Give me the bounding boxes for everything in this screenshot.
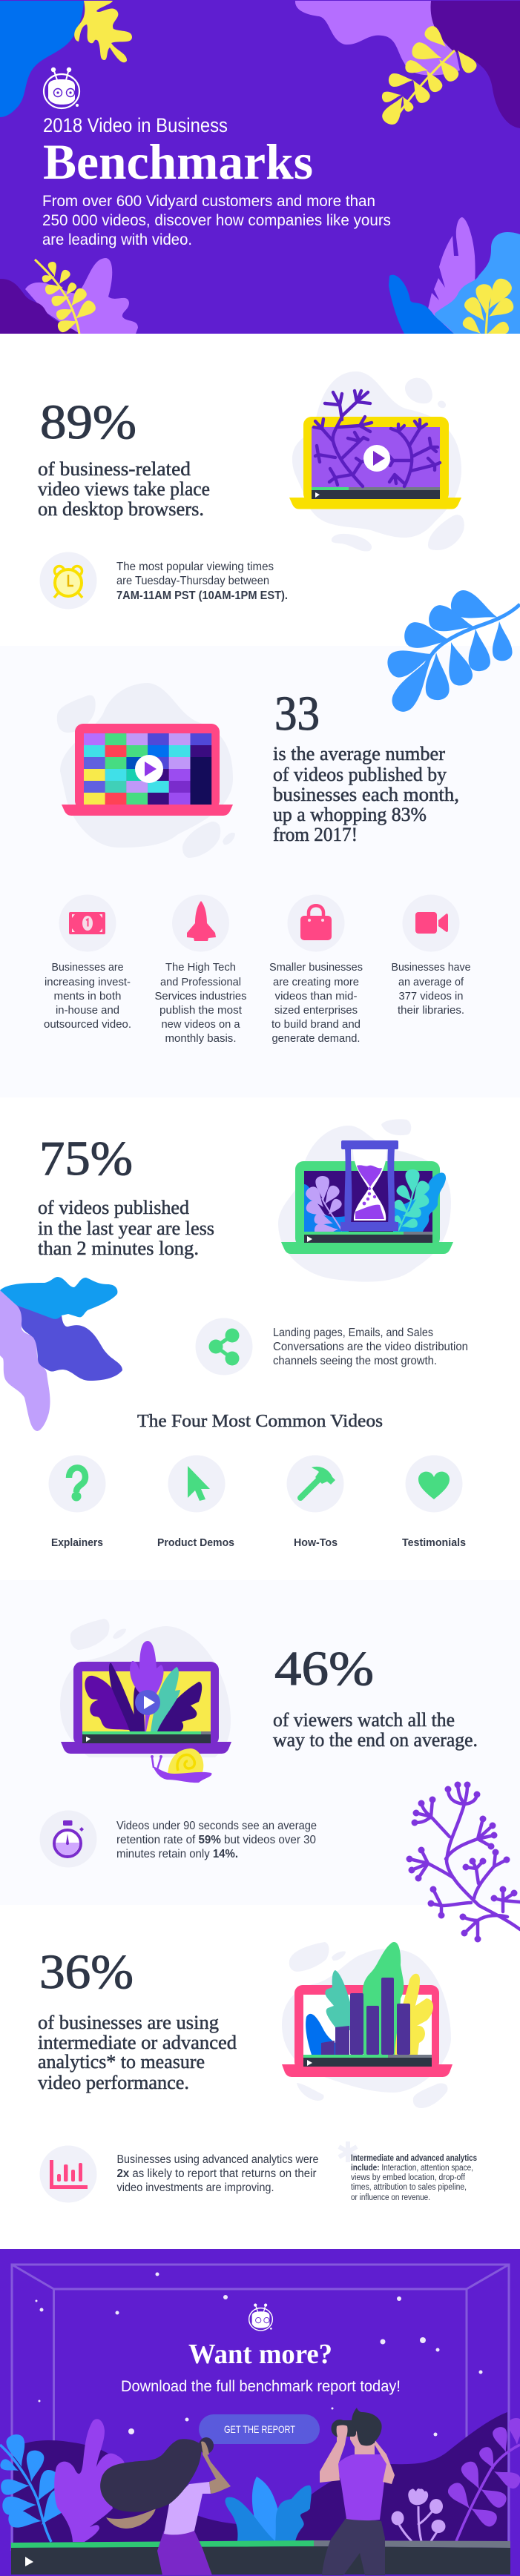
decoration: purple plant <box>54 2419 125 2542</box>
text block: investments: increasing invest- <box>45 977 131 988</box>
decoration: faint asterisk <box>339 2141 357 2162</box>
text block: advanced analytics: video investments are improving. <box>117 2182 274 2194</box>
text block: stat description <box>273 1709 478 1751</box>
text block: retention: retention rate of 59% but videos over 30 <box>116 1834 316 1846</box>
text block: stat description <box>38 2012 237 2093</box>
text block: investments: ments in both <box>53 991 122 1003</box>
text block: stat description: of businesses are using <box>38 2012 219 2033</box>
text block: advanced analytics: 2x as likely to report that returns on their <box>117 2167 316 2180</box>
panel: hero header <box>0 0 520 340</box>
icon: alarm clock <box>40 552 96 610</box>
button: get the report <box>199 2414 320 2444</box>
icon: snail <box>151 1748 211 1783</box>
label: product demos: Product Demos <box>157 1537 234 1549</box>
text block: industries: monthly basis. <box>165 1033 236 1045</box>
text block: stat description: up a whopping 83% <box>273 804 427 825</box>
item: how-tos <box>286 1455 344 1549</box>
text block: intro paragraph: are leading with video. <box>42 231 192 248</box>
stat: 75%: 75% <box>39 1132 133 1186</box>
text block: advanced analytics <box>117 2153 319 2194</box>
heading: four most common videos: The Four Most Common Videos <box>137 1412 383 1431</box>
text block: distribution channels: Landing pages, Emails, and Sales <box>273 1327 433 1339</box>
text block: stat description: video performance. <box>38 2072 189 2093</box>
decoration: teal branch on screen <box>392 1169 432 1231</box>
text block: smaller businesses: sized enterprises <box>274 1005 358 1017</box>
label: testimonials: Testimonials <box>402 1537 466 1549</box>
text block: stat description <box>38 458 210 520</box>
text block: stat description: on desktop browsers. <box>38 498 204 520</box>
text block: stat description: video views take place <box>38 478 210 500</box>
chart: video thumbnail grid <box>84 733 211 805</box>
icon: hammer <box>300 1467 335 1498</box>
stat: 36%: 36% <box>39 1945 134 1999</box>
video player bar <box>11 2540 510 2575</box>
text block: analytics footnote: views by embed location, drop-off <box>351 2173 466 2182</box>
decoration: bottom-right lilac fern <box>427 217 475 334</box>
decoration: right purple branch <box>445 2418 520 2541</box>
illustration: woman with binoculars <box>100 2437 231 2575</box>
text block: video libraries: 377 videos in <box>399 991 463 1003</box>
text block: smaller businesses: videos than mid- <box>274 991 358 1003</box>
illustration: pink laptop with video grid <box>57 683 235 858</box>
icon: video camera <box>415 912 448 934</box>
text block: industries <box>154 962 246 1045</box>
item: video libraries <box>392 894 470 1017</box>
text block: investments: Businesses are <box>52 962 123 974</box>
decoration: dark hills <box>13 2412 507 2551</box>
label: how-tos: How-Tos <box>294 1537 338 1549</box>
text block: distribution channels <box>273 1327 468 1367</box>
text block: intro paragraph: 250 000 videos, discover how companies like yours <box>42 212 391 229</box>
text block: analytics footnote: or influence on revenue. <box>351 2193 430 2202</box>
decoration: purple coral <box>409 1785 520 1939</box>
decoration: bottom-left yellow branch <box>35 260 98 334</box>
text block: retention: Videos under 90 seconds see an average <box>116 1820 317 1832</box>
panel: videos published stat <box>0 587 520 1097</box>
text block: advanced analytics: Businesses using advanced analytics were <box>117 2153 319 2166</box>
item: investments <box>44 894 131 1031</box>
text block: industries: Services industries <box>154 991 246 1003</box>
panel: analytics stat <box>0 1785 520 2249</box>
text block: analytics footnote: Intermediate and advanced analytics <box>351 2154 477 2163</box>
text block: viewing times: 7AM-11AM PST (10AM-1PM EST). <box>116 589 288 602</box>
item: explainers <box>49 1455 105 1549</box>
item: industries <box>154 894 246 1045</box>
decoration: stars <box>36 2272 482 2437</box>
text block: viewing times: The most popular viewing times <box>116 561 274 573</box>
text block: stat description: than 2 minutes long. <box>38 1238 199 1259</box>
icon: stopwatch <box>40 1811 96 1867</box>
icon: banknote <box>69 912 105 934</box>
icon: analytics chart <box>40 2146 96 2202</box>
text block: investments: in-house and <box>56 1005 119 1017</box>
text block: viewing times: are Tuesday-Thursday between <box>116 575 269 587</box>
decoration: left blue branch <box>0 2433 74 2542</box>
text block: investments: outsourced video. <box>44 1019 131 1031</box>
decoration: top-left yellow coral <box>74 1 132 62</box>
text block: industries: and Professional <box>160 977 241 988</box>
text block: stat description: from 2017! <box>273 824 358 845</box>
text block: video libraries <box>392 962 470 1017</box>
text block: stat description: in the last year are less <box>38 1218 214 1239</box>
label: explainers: Explainers <box>51 1537 103 1549</box>
text block: stat description: of viewers watch all the <box>273 1709 455 1731</box>
title: Benchmarks: Benchmarks <box>43 133 313 190</box>
stat: 89%: 89% <box>40 395 136 449</box>
illustration: pink laptop with bar chart <box>282 1942 452 2108</box>
stat: 46%: 46% <box>274 1642 374 1696</box>
decoration: bottom-right light blue leaf <box>435 232 520 334</box>
text block: stat description: businesses each month, <box>273 784 459 805</box>
decoration: left blue blob <box>0 1277 117 1319</box>
decoration: top-right dark blob <box>431 1 520 128</box>
panel: call to action footer <box>0 2249 520 2576</box>
icon: cursor <box>188 1466 210 1501</box>
text block: stat description <box>273 743 459 845</box>
text block: stat description: intermediate or advanced <box>38 2032 237 2053</box>
text block: analytics footnote: include: Interaction, attention space, <box>351 2164 473 2173</box>
item: testimonials <box>402 1455 466 1549</box>
text block: smaller businesses: are creating more <box>273 977 359 988</box>
text block: intro paragraph <box>42 193 391 248</box>
chart: bars <box>321 1978 410 2055</box>
icon: Vidyard robot logo <box>44 67 79 108</box>
icon: share <box>196 1318 252 1375</box>
stat: 33: 33 <box>274 687 320 741</box>
icon: question mark <box>69 1467 85 1501</box>
decoration: laptop frame lines <box>12 2265 509 2551</box>
button: get the report: GET THE REPORT <box>224 2423 295 2435</box>
decoration: blue branch <box>384 587 520 716</box>
illustration: purple laptop with leaves and snail <box>60 1619 231 1783</box>
panel: viewer retention stat <box>0 1580 520 1905</box>
text block: stat description: way to the end on average. <box>273 1729 478 1751</box>
decoration: bottom-right blue leaf <box>389 275 454 334</box>
illustration: yellow laptop with coral <box>289 371 464 552</box>
text block: stat description: of videos published <box>38 1197 189 1218</box>
text block: smaller businesses: to build brand and <box>271 1019 361 1031</box>
decoration: left indigo blob <box>16 1305 122 1381</box>
panel: desktop browsers stat <box>0 334 520 646</box>
decoration: bottom-left lilac plant <box>25 258 138 334</box>
text block: video libraries: an average of <box>398 977 464 988</box>
text block: video libraries: their libraries. <box>398 1005 464 1017</box>
text block: distribution channels: channels seeing the most growth. <box>273 1355 437 1367</box>
decoration: bottom-left dark blob <box>0 279 79 334</box>
text block: video libraries: Businesses have <box>392 962 470 974</box>
text block: smaller businesses <box>269 962 363 1045</box>
illustration: man with binoculars <box>320 2408 395 2575</box>
heading: want more: Want more? <box>188 2339 332 2370</box>
item: smaller businesses <box>269 894 363 1045</box>
text block: distribution channels: Conversations are the video distribution <box>273 1341 468 1353</box>
text block: stat description: of videos published by <box>273 764 447 785</box>
item: product demos <box>157 1455 234 1549</box>
decoration: plants behind bars <box>306 1942 433 2055</box>
decoration: top-right lilac blob <box>295 1 460 76</box>
decoration: lilac flowers <box>392 2489 445 2541</box>
decoration: lilac branch on screen <box>303 1176 343 1237</box>
text block: industries: new videos on a <box>162 1019 240 1031</box>
illustration: green laptop with hourglass <box>278 1119 453 1282</box>
title: eyebrow: 2018 Video in Business <box>43 114 228 136</box>
text block: retention <box>116 1820 317 1860</box>
decoration: top-right yellow branch <box>380 24 479 128</box>
text block: industries: The High Tech <box>165 962 236 974</box>
icon: rocket <box>187 901 216 941</box>
text block: stat description: of business-related <box>38 458 191 480</box>
text block: viewing times <box>116 561 288 602</box>
text block: investments <box>44 962 131 1031</box>
decoration: bottom-right yellow branch <box>461 276 516 340</box>
panel: video length stat <box>0 1097 520 1580</box>
text block: stat description <box>38 1197 214 1259</box>
decoration: top-left blue blob <box>0 1 84 117</box>
text block: analytics footnote: times, attribution to sales pipeline, <box>351 2183 467 2192</box>
icon: heart <box>418 1472 450 1499</box>
decoration: left lilac blob <box>0 1290 50 1431</box>
text block: retention: minutes retain only 14%. <box>116 1848 238 1860</box>
decoration: centre blue plant <box>226 2477 312 2541</box>
icon: shopping bag <box>300 905 332 940</box>
illustration: hourglass <box>340 1140 398 1231</box>
text block: smaller businesses: Smaller businesses <box>269 962 363 974</box>
text block: industries: publish the most <box>159 1005 242 1017</box>
text block: stat description: analytics* to measure <box>38 2051 205 2073</box>
text block: intro paragraph: From over 600 Vidyard customers and more than <box>42 193 375 210</box>
text block: download prompt: Download the full benchmark report today! <box>121 2378 401 2395</box>
text block: stat description: is the average number <box>273 743 445 764</box>
text block: analytics footnote <box>351 2154 477 2202</box>
icon: Vidyard robot logo <box>249 2304 272 2331</box>
text block: smaller businesses: generate demand. <box>271 1033 361 1045</box>
